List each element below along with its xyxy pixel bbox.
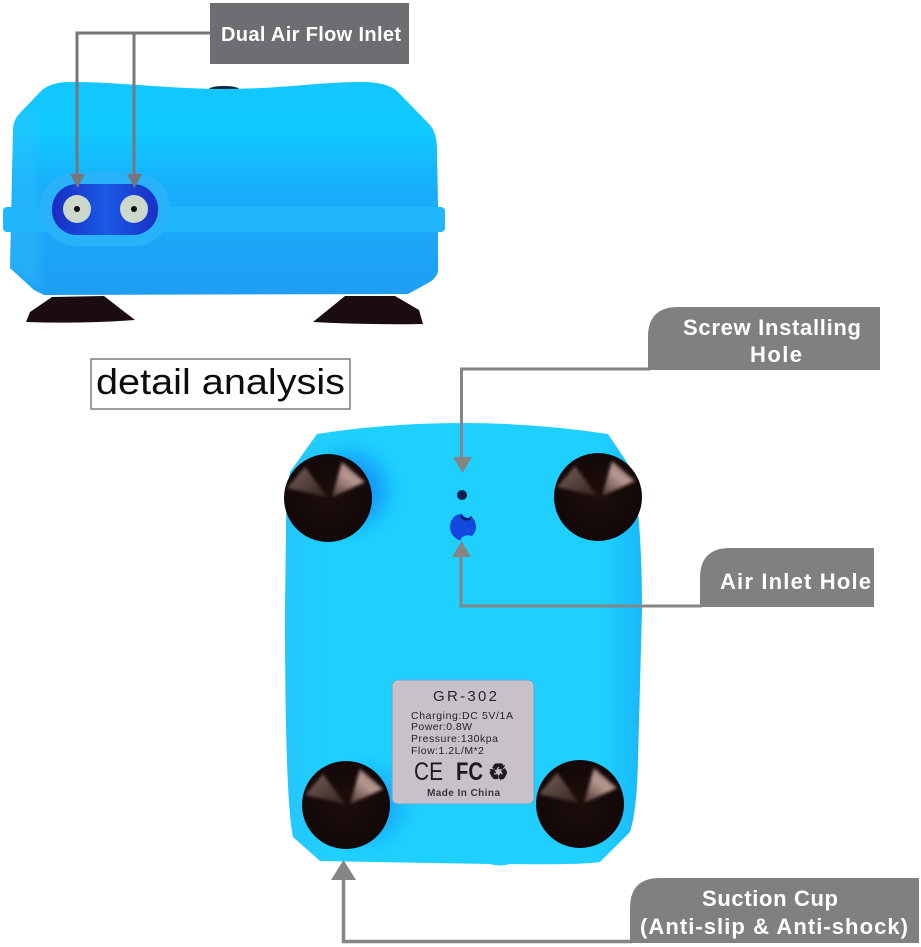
side shading (10, 110, 38, 281)
callout: screw installing hole (453, 307, 880, 473)
arrow (331, 860, 632, 942)
screw hole (457, 490, 467, 500)
specifications: Power:0.8W (411, 721, 472, 733)
foot shadow (314, 454, 386, 526)
callout: suction cup (331, 860, 919, 943)
label box (630, 878, 919, 943)
callout: dual air flow inlet (70, 3, 409, 188)
specifications: Pressure:130kpa (411, 733, 498, 745)
cup bottom left (302, 761, 390, 849)
pump underside body (285, 423, 642, 866)
inlet left (63, 195, 91, 223)
arrow (453, 369, 650, 473)
label text: Screw Installing (683, 315, 861, 340)
rating label (392, 680, 534, 804)
suction feet, side view (26, 296, 423, 324)
specifications: Charging:DC 5V/1A (411, 710, 513, 722)
rating label: GR-302 (433, 688, 497, 705)
cup top left (284, 454, 372, 542)
certification marks: FC (456, 758, 483, 786)
label box (210, 3, 409, 64)
inlet recess (40, 172, 170, 246)
certification marks (414, 758, 509, 786)
air inlet hole (450, 514, 476, 540)
certification marks: CE (414, 758, 443, 786)
heading: detail analysis: detail analysis (96, 361, 345, 402)
seam band (3, 207, 445, 232)
label text: Dual Air Flow Inlet (221, 24, 401, 46)
callout: suction cup: (Anti-slip & Anti-shock) (640, 914, 908, 939)
label box (700, 548, 874, 607)
cup bottom right (536, 760, 624, 848)
top pump product photo (3, 82, 445, 324)
top knob (208, 86, 240, 94)
label text: Air Inlet Hole (720, 569, 871, 594)
bottom pump product photo (284, 423, 642, 866)
arrows (70, 33, 210, 188)
pump body (10, 82, 438, 295)
rating label: Made In China (427, 788, 500, 799)
suction cups (284, 453, 642, 849)
callout: air inlet hole (452, 541, 874, 607)
specifications (411, 710, 513, 757)
arrow (452, 541, 702, 606)
callout: screw installing hole: Hole (750, 342, 802, 367)
specifications: Flow:1.2L/M*2 (411, 745, 484, 757)
inlet right (120, 195, 148, 223)
cup top right (554, 453, 642, 541)
label text: Suction Cup (702, 886, 838, 911)
label box (648, 307, 880, 370)
certification marks: ♻ (488, 759, 509, 785)
